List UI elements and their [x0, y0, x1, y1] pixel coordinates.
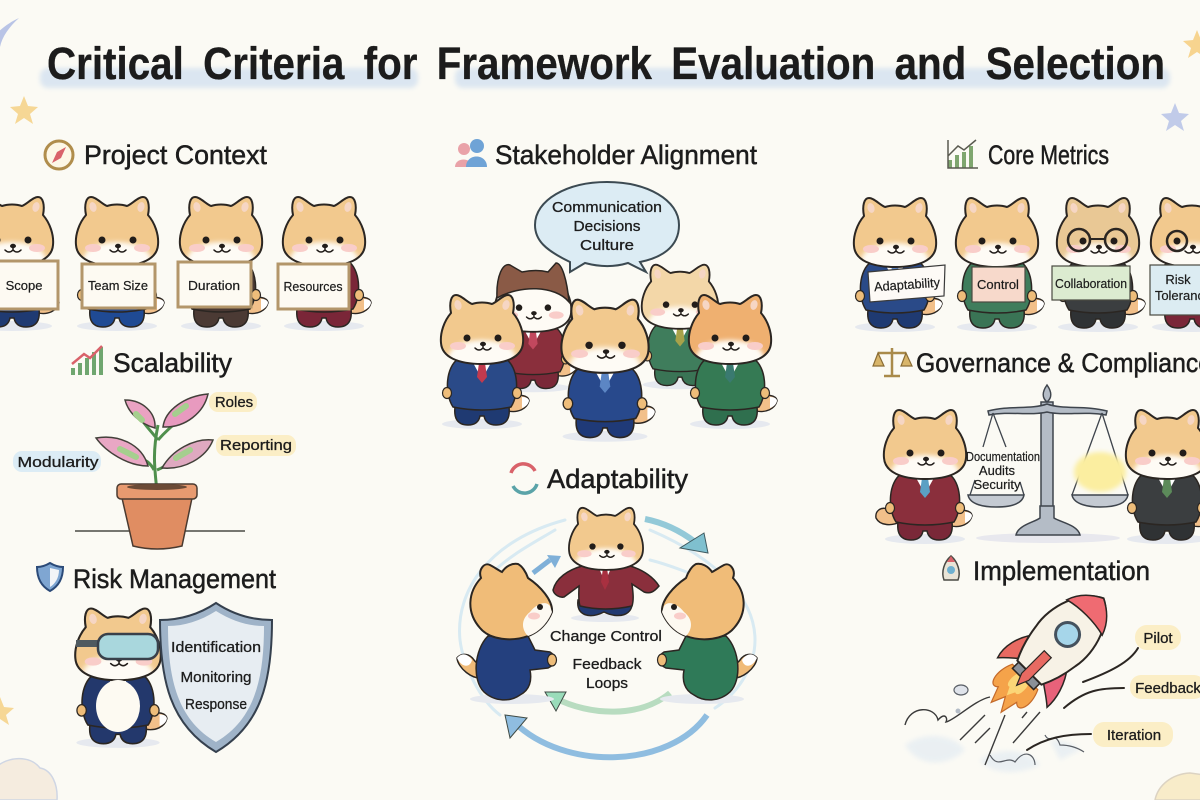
cat: risk tolerance: [1150, 198, 1200, 332]
cat: adaptability: [854, 198, 945, 332]
scale labels: Audits: [979, 463, 1016, 478]
heading: scalability: [72, 346, 232, 378]
decoration: blue star: [1161, 103, 1189, 131]
speech bubble: [535, 182, 679, 272]
cat: duration: [178, 197, 268, 331]
scale labels: [966, 449, 1040, 492]
decoration: moon: [0, 18, 19, 47]
cat: resources: Resources: [284, 279, 343, 294]
panel: adaptability: [457, 464, 757, 757]
decoration: orange star: [1183, 30, 1200, 58]
panel: project context: [0, 140, 371, 331]
heading: risk management: Risk Management: [73, 564, 276, 594]
heading: stakeholder alignment: Stakeholder Alignment: [495, 140, 757, 170]
heading: implementation: Implementation: [973, 556, 1150, 586]
cat: back right green: [642, 265, 724, 389]
label: modularity: [13, 451, 101, 472]
shield: Response: [185, 696, 247, 713]
label: feedback loops: [572, 656, 642, 692]
label: reporting: Reporting: [220, 437, 292, 454]
orbit swirl: [460, 520, 755, 715]
cat: left burgundy: [876, 410, 972, 544]
cat: collaboration: [1052, 198, 1145, 332]
flower pot: [117, 484, 197, 549]
exhaust clouds and motion lines: [905, 685, 1084, 772]
heading: adaptability: Adaptability: [547, 464, 688, 494]
label: feedback: [1064, 675, 1200, 708]
panel: implementation: [905, 556, 1200, 772]
cat: control: [956, 198, 1044, 332]
label: pilot: [1083, 625, 1181, 682]
scale labels: Security: [974, 477, 1021, 492]
label: feedback: Feedback: [1135, 680, 1200, 697]
speech bubble: Culture: [580, 237, 634, 254]
label: feedback loops: Feedback: [572, 656, 642, 673]
label: roles: Roles: [215, 394, 253, 411]
cat: collaboration: Collaboration: [1055, 276, 1127, 291]
cat: left navy: [457, 564, 556, 704]
cat: duration: Duration: [188, 278, 240, 293]
label: iteration: [1027, 722, 1173, 750]
cat: front centre navy: [561, 300, 655, 442]
panel: scalability: [13, 346, 296, 549]
decoration: bottom left cloud: [0, 759, 57, 800]
label: feedback loops: Loops: [586, 675, 628, 692]
panel: risk management: [37, 563, 276, 752]
speech bubble: Decisions: [574, 218, 640, 235]
arrow: inner bottom: [545, 692, 670, 712]
heading: core metrics: [948, 140, 1109, 170]
arrow: top left: [533, 555, 561, 573]
heading: scalability: Scalability: [113, 348, 232, 378]
arrow: outer bottom: [505, 715, 707, 757]
cat: team size: Team Size: [88, 278, 148, 293]
label: modularity: Modularity: [18, 454, 99, 471]
cat: resources: [278, 197, 371, 331]
cat: risk tolerance: Risk: [1165, 272, 1191, 287]
label: reporting: [216, 435, 296, 456]
decoration: left star: [0, 697, 14, 725]
scale labels: Documentation: [966, 449, 1040, 464]
label: iteration: Iteration: [1107, 727, 1161, 744]
cat: back left burgundy: [495, 263, 577, 392]
cat: scope: Scope: [6, 278, 42, 293]
shield: Identification: [171, 639, 261, 656]
panel: core metrics: [854, 140, 1200, 332]
rocket: [971, 574, 1130, 733]
label: change control: Change Control: [550, 628, 662, 645]
speech bubble: Communication: [552, 199, 662, 216]
cat: right green: [658, 564, 757, 704]
cat: team size: [76, 197, 164, 331]
label: roles: [209, 392, 257, 412]
cat: front right green: [689, 295, 777, 429]
ground line: [75, 530, 245, 532]
decoration: bottom right cloud: [1155, 773, 1200, 800]
cat: right black: [1126, 410, 1200, 544]
cat: front left navy: [441, 295, 529, 429]
cat: scope: [0, 197, 59, 331]
shield: Monitoring: [180, 669, 252, 686]
heading: core metrics: Core Metrics: [988, 140, 1109, 170]
balance scale: [968, 385, 1128, 543]
shield: [160, 603, 272, 752]
arrow: top right: [645, 519, 708, 553]
cat: top burgundy: [553, 508, 659, 622]
label: pilot: Pilot: [1143, 630, 1173, 647]
panel: stakeholder alignment: [441, 139, 777, 442]
cat with goggles: [75, 608, 167, 748]
panel: governance and compliance: [873, 348, 1200, 544]
cat: control: Control: [977, 277, 1019, 292]
cat: adaptability: Adaptability: [874, 275, 941, 294]
decoration: yellow star: [10, 96, 38, 124]
plant: [96, 394, 213, 492]
heading: project context: Project Context: [84, 140, 267, 170]
